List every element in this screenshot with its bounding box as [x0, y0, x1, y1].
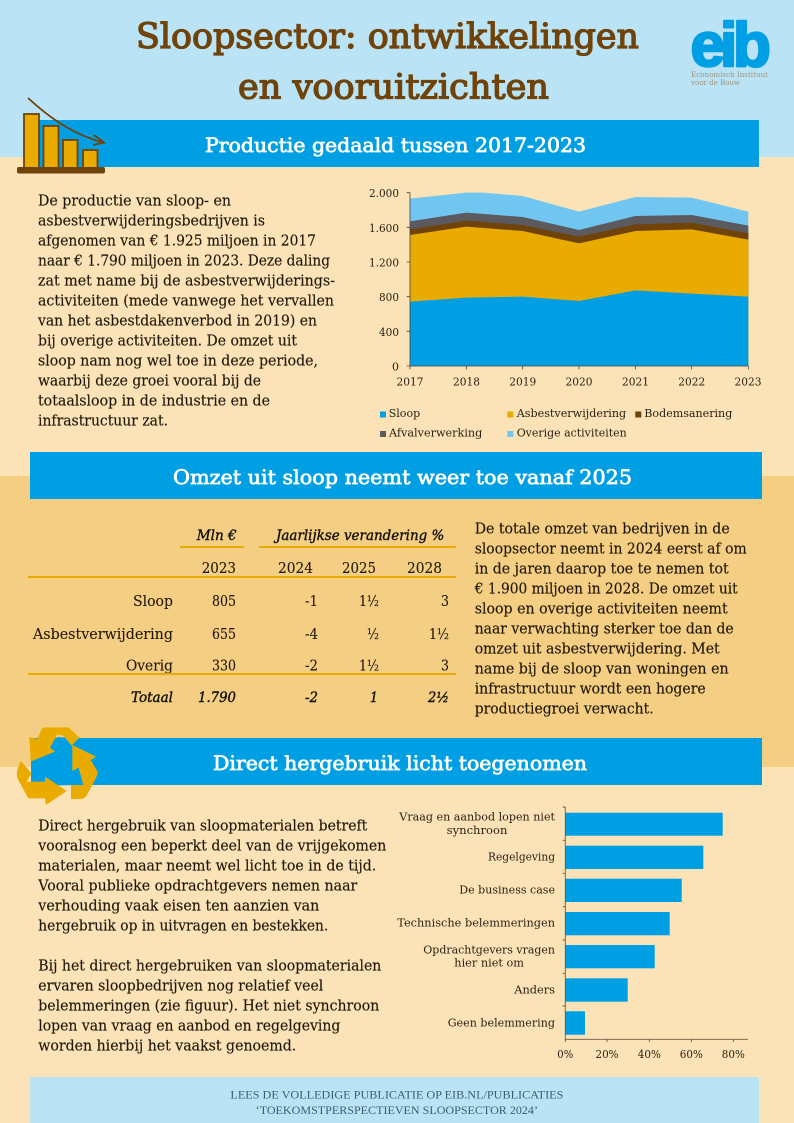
table: omzet: 1½	[359, 659, 379, 675]
table: omzet: 3	[441, 594, 449, 610]
table: omzet: 1.790	[198, 690, 236, 706]
area chart: productie per activiteit: 400	[379, 325, 399, 339]
legend: area chart: Afvalverwerking	[388, 426, 483, 440]
footer: LEES DE VOLLEDIGE PUBLICATIE OP EIB.NL/PUBLICATIES	[230, 1088, 563, 1102]
table: omzet: ½	[367, 627, 379, 643]
table: omzet: 3	[441, 659, 449, 675]
footer	[30, 1077, 759, 1123]
text block: hergebruik	[37, 819, 386, 1055]
text block: omzet: sloopsector neemt in 2024 eerst af om	[475, 541, 747, 557]
bar chart: belemmeringen: Geen belemmering	[448, 1016, 556, 1030]
table: omzet: -2	[305, 659, 318, 675]
table: omzet: 2023	[202, 561, 236, 577]
text block: hergebruik: Vooral publieke opdrachtgevers nemen naar	[37, 879, 357, 895]
text block: hergebruik: materialen, maar neemt wel licht toe in de tijd.	[38, 859, 376, 875]
text block: omzet: sloop en overige activiteiten neemt	[475, 601, 728, 617]
table: omzet: 805	[212, 594, 236, 610]
legend: area chart	[380, 406, 733, 440]
logo: eib: Economisch Instituut	[691, 71, 768, 79]
text block: productie: naar € 1.790 miljoen in 2023. Deze daling	[38, 254, 330, 270]
logo: eib: voor de Bouw	[690, 79, 740, 87]
text block: omzet: name bij de sloop van woningen en	[475, 661, 729, 677]
text block: productie: asbestverwijderingsbedrijven is	[38, 214, 265, 230]
text block: hergebruik: Bij het direct hergebruiken van sloopmaterialen	[38, 959, 381, 975]
text block: omzet: De totale omzet van bedrijven in de	[475, 521, 730, 537]
bar chart: belemmeringen: Regelgeving	[488, 850, 556, 864]
text block: omzet: infrastructuur wordt een hogere	[475, 681, 706, 697]
bar chart: belemmeringen: hier niet om	[454, 956, 524, 970]
table: omzet: 1	[370, 690, 378, 706]
text block: hergebruik: vooralsnog een beperkt deel van de vrijgekomen	[37, 839, 386, 855]
title: Sloopsector: ontwikkelingen	[136, 17, 639, 57]
bar chart: belemmeringen: synchroon	[447, 823, 508, 837]
text block: hergebruik: belemmeringen (zie figuur). Het niet synchroon	[38, 999, 379, 1015]
area chart: productie per activiteit: 1.200	[369, 256, 399, 270]
text block: omzet: productiegroei verwacht.	[475, 701, 654, 717]
text block: hergebruik: verhouding vaak eisen ten aanzien van	[37, 899, 319, 915]
banner: omzet: Omzet uit sloop neemt weer toe vanaf 2025	[173, 465, 632, 489]
text block: productie: bij overige activiteiten. De omzet uit	[38, 334, 297, 350]
area chart: productie per activiteit: 2021	[622, 374, 649, 388]
area chart: productie per activiteit: 800	[379, 290, 399, 304]
table: omzet: 330	[212, 659, 236, 675]
text block: omzet	[474, 521, 747, 717]
table: omzet: Mln €	[196, 528, 237, 544]
bar chart: belemmeringen: Vraag en aanbod lopen niet	[398, 810, 555, 824]
text block: productie: activiteiten (mede vanwege het vervallen	[38, 294, 334, 310]
table: omzet: Sloop	[133, 594, 173, 610]
text block: omzet: in de jaren daarop toe te nemen tot	[475, 561, 729, 577]
legend: area chart: Asbestverwijdering	[516, 406, 627, 420]
text block: productie: totaalsloop in de industrie en de	[38, 394, 270, 410]
area chart: productie per activiteit: 2018	[453, 374, 480, 388]
text block: omzet: omzet uit asbestverwijdering. Met	[475, 641, 720, 657]
area chart: productie per activiteit: 1.600	[369, 221, 399, 235]
legend: area chart: Sloop	[389, 406, 420, 420]
text block: productie: van het asbestdakenverbod in 2019) en	[37, 314, 317, 330]
table: omzet: -1	[305, 594, 318, 610]
text block: productie: infrastructuur zat.	[38, 414, 168, 430]
table: omzet: Totaal	[131, 690, 173, 706]
table: omzet	[28, 528, 456, 706]
text block: hergebruik: Direct hergebruik van sloopmaterialen betreft	[38, 819, 367, 835]
text block: hergebruik: worden hierbij het vaakst genoemd.	[38, 1039, 296, 1055]
table: omzet: -4	[305, 627, 318, 643]
banner: hergebruik: Direct hergebruik licht toegenomen	[213, 751, 587, 775]
table: omzet: Overig	[126, 659, 173, 675]
footer: ‘TOEKOMSTPERSPECTIEVEN SLOOPSECTOR 2024’	[256, 1103, 538, 1117]
text block: omzet: naar verwachting sterker toe dan de	[475, 621, 734, 637]
bar chart: belemmeringen: 40%	[638, 1047, 661, 1061]
text block: omzet: € 1.900 miljoen in 2028. De omzet uit	[474, 581, 738, 597]
bar chart: belemmeringen: Opdrachtgevers vragen	[423, 942, 556, 956]
table: omzet: 2028	[407, 561, 442, 577]
bar chart: belemmeringen: De business case	[459, 883, 555, 897]
table: omzet: 1½	[429, 627, 449, 643]
legend: area chart: Bodemsanering	[644, 406, 733, 420]
bar chart: belemmeringen: 80%	[722, 1047, 745, 1061]
bar chart: belemmeringen	[397, 807, 748, 1061]
title: en vooruitzichten	[238, 68, 549, 108]
bar chart: belemmeringen: 20%	[596, 1047, 619, 1061]
table: omzet: 2½	[427, 690, 449, 706]
table: omzet: Asbestverwijdering	[32, 627, 173, 643]
table: omzet: Jaarlijkse verandering %	[273, 528, 444, 544]
bar chart: belemmeringen: 60%	[680, 1047, 703, 1061]
icon: recycling arrows	[17, 727, 98, 805]
text block: productie: waarbij deze groei vooral bij de	[38, 374, 261, 390]
area chart: productie per activiteit: 2019	[509, 374, 536, 388]
icon: declining bar chart	[17, 98, 105, 174]
text block: productie: sloop nam nog wel toe in deze periode,	[38, 354, 318, 370]
text block: productie: zat met name bij de asbestverwijderings-	[38, 274, 335, 290]
area chart: productie per activiteit: 2.000	[369, 186, 399, 200]
table: omzet: -2	[305, 690, 318, 706]
banner: omzet	[30, 452, 762, 499]
text block: hergebruik: lopen van vraag en aanbod en regelgeving	[38, 1019, 340, 1035]
bar chart: belemmeringen: Anders	[513, 982, 555, 996]
text block: hergebruik: hergebruik op in uitvragen en bestekken.	[38, 919, 328, 935]
area chart: productie per activiteit: 0	[392, 360, 399, 374]
title	[136, 17, 639, 108]
text block: productie: afgenomen van € 1.925 miljoen in 2017	[38, 234, 316, 250]
area chart: productie per activiteit: 2017	[396, 374, 424, 388]
bar chart: belemmeringen: Technische belemmeringen	[397, 916, 556, 930]
area chart: productie per activiteit: 2023	[734, 374, 762, 388]
text block: productie: De productie van sloop- en	[38, 194, 231, 210]
bar chart: belemmeringen: 0%	[557, 1047, 573, 1061]
area chart: productie per activiteit: 2022	[678, 374, 705, 388]
area chart: productie per activiteit: 2020	[566, 374, 592, 388]
table: omzet: 2024	[278, 561, 313, 577]
area chart: productie per activiteit	[369, 186, 762, 388]
logo: eib: eib	[690, 11, 771, 80]
text block: productie	[37, 194, 335, 430]
table: omzet: 655	[212, 627, 236, 643]
banner: hergebruik	[31, 738, 762, 785]
table: omzet: 1½	[359, 594, 379, 610]
table: omzet: 2025	[342, 561, 376, 577]
banner: productie: Productie gedaald tussen 2017-2023	[205, 133, 586, 157]
legend: area chart: Overige activiteiten	[517, 426, 627, 440]
banner: productie	[30, 120, 759, 167]
text block: hergebruik: ervaren sloopbedrijven nog relatief veel	[38, 979, 324, 995]
